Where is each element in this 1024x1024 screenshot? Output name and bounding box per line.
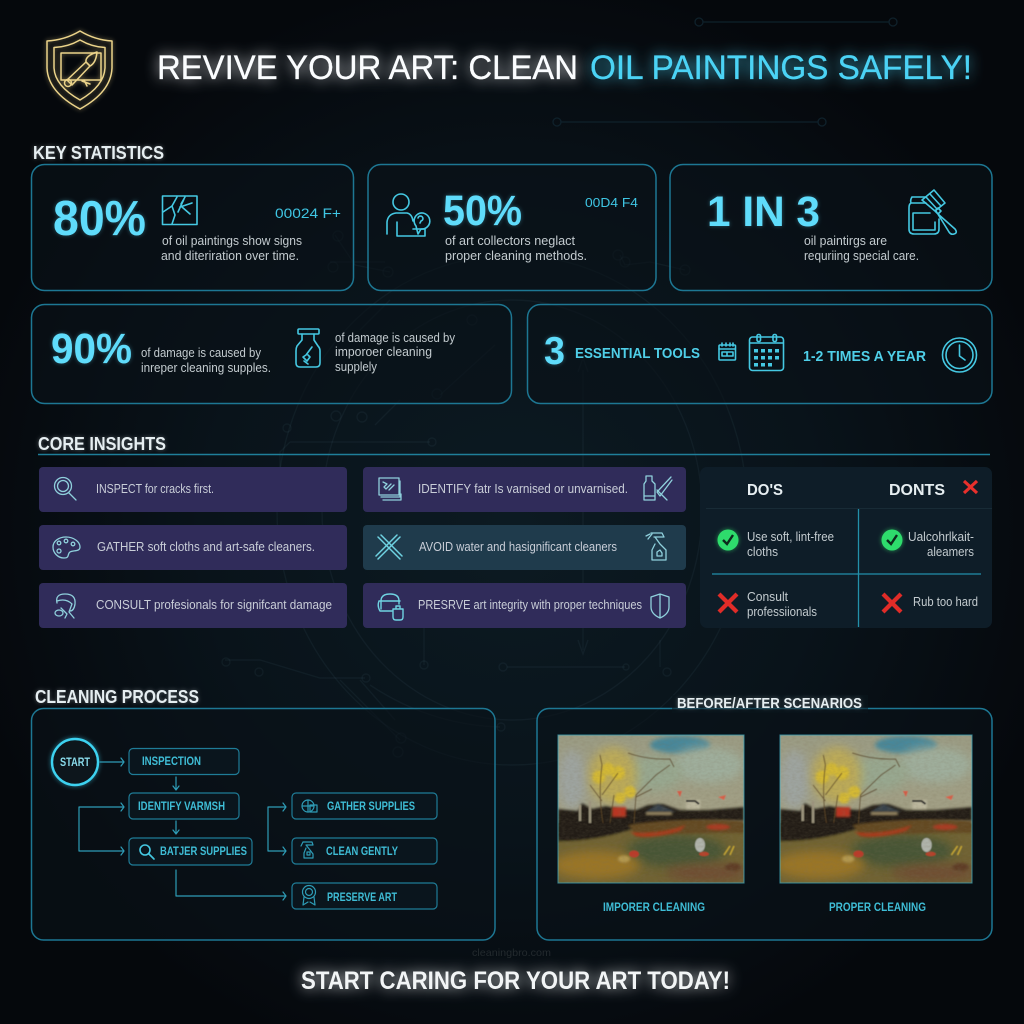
panel: do's and don'ts table: Ualcohrlkait- bbox=[908, 530, 974, 544]
insight: inspect: INSPECT for cracks first. bbox=[96, 482, 214, 496]
step: gather supplies: GATHER SUPPLIES bbox=[327, 801, 415, 813]
panel: 80% statistic: 00024 F+ bbox=[275, 205, 341, 221]
painting: proper cleaning bbox=[774, 735, 978, 914]
panel: 90% statistic: supplely bbox=[335, 360, 378, 374]
flow arrows bbox=[79, 758, 286, 900]
step: inspection bbox=[129, 748, 239, 774]
panel: 80% statistic: 80% bbox=[53, 192, 146, 246]
icon: red cross right bbox=[883, 594, 901, 612]
insight: identify bbox=[363, 467, 686, 512]
insight: gather: GATHER soft cloths and art-safe cleaners. bbox=[97, 540, 315, 554]
heading: core insights: CORE INSIGHTS bbox=[38, 434, 166, 454]
step: identify varnish: IDENTIFY VARMSH bbox=[138, 801, 225, 813]
step: clean gently: CLEAN GENTLY bbox=[326, 846, 398, 858]
step: gather supplies bbox=[292, 793, 437, 819]
panel: 1 in 3 statistic: requriing special care. bbox=[804, 249, 919, 263]
panel: 1 in 3 statistic: 1 IN 3 bbox=[707, 188, 820, 236]
icon: green check right bbox=[882, 530, 902, 550]
painting: proper cleaning: PROPER CLEANING bbox=[829, 902, 926, 914]
panel: do's and don'ts table bbox=[700, 467, 992, 628]
panel: core insight rows bbox=[39, 467, 686, 628]
watermark: cleaningbro.com bbox=[472, 947, 551, 959]
icon: cleaner bottle bbox=[296, 329, 320, 367]
step: inspection: INSPECTION bbox=[142, 756, 201, 768]
panel: 50% statistic: proper cleaning methods. bbox=[445, 249, 587, 263]
panel: tools and frequency: 3 bbox=[544, 330, 565, 373]
panel: 90% statistic bbox=[32, 304, 512, 404]
step: gather supplies with search icon bbox=[129, 838, 252, 865]
decorative top circuit lines bbox=[553, 18, 897, 126]
panel: do's and don'ts table: DONTS bbox=[889, 482, 945, 499]
insight: gather bbox=[39, 525, 347, 570]
step: preserve art bbox=[292, 883, 437, 909]
icon: shield with paintbrush logo bbox=[47, 31, 112, 109]
insight: preserve: PRESRVE art integrity with proper techniques bbox=[418, 598, 642, 612]
panel: 90% statistic: inreper cleaning supples. bbox=[141, 361, 271, 375]
panel: do's and don'ts table: aleamers bbox=[927, 545, 974, 559]
panel: 80% statistic: and diteriration over time. bbox=[161, 249, 299, 263]
icon: green check left bbox=[718, 530, 738, 550]
icon: red cross header bbox=[964, 481, 977, 493]
insight: consult: CONSULT profesionals for signifcant damage bbox=[96, 598, 332, 612]
background circuit pattern bbox=[222, 231, 747, 765]
step: gather supplies with search icon: BATJER SUPPLIES bbox=[160, 846, 247, 858]
panel: tools and frequency: ESSENTIAL TOOLS bbox=[575, 346, 700, 362]
start node: START bbox=[60, 757, 90, 769]
icon: clock bbox=[942, 338, 976, 372]
title: OIL PAINTINGS SAFELY! bbox=[590, 49, 972, 87]
start node bbox=[52, 739, 98, 785]
panel: do's and don'ts table: Rub too hard bbox=[913, 595, 978, 609]
panel: do's and don'ts table: Consult bbox=[747, 590, 789, 604]
icon: red cross left bbox=[719, 594, 737, 612]
panel: 1 in 3 statistic: oil paintirgs are bbox=[804, 234, 887, 248]
panel: do's and don'ts table: Use soft, lint-free bbox=[747, 530, 834, 544]
panel: 90% statistic: 90% bbox=[51, 325, 132, 373]
panel: do's and don'ts table: cloths bbox=[747, 545, 778, 559]
heading: cleaning process: CLEANING PROCESS bbox=[35, 687, 199, 707]
panel: 80% statistic: of oil paintings show signs bbox=[162, 234, 302, 248]
insight: avoid: AVOID water and hasignificant cleaners bbox=[419, 540, 617, 554]
panel: 50% statistic: 00D4 F4 bbox=[585, 195, 638, 210]
panel: 50% statistic: of art collectors neglact bbox=[445, 234, 576, 248]
panel: do's and don'ts table: professiionals bbox=[747, 605, 817, 619]
panel: 50% statistic: 50% bbox=[443, 187, 522, 235]
icon: cracked canvas bbox=[162, 196, 197, 224]
painting: improper cleaning bbox=[552, 735, 750, 914]
icon: small calendar bbox=[719, 343, 736, 360]
step: preserve art: PRESERVE ART bbox=[327, 892, 397, 904]
panel: before and after scenarios: BEFORE/AFTER SCENARIOS bbox=[677, 696, 862, 712]
step: clean gently bbox=[292, 838, 437, 864]
call to action footer: START CARING FOR YOUR ART TODAY! bbox=[301, 967, 730, 995]
panel: cleaning process flowchart bbox=[32, 708, 495, 940]
insight: preserve bbox=[363, 583, 686, 628]
panel: tools and frequency: 1-2 TIMES A YEAR bbox=[803, 349, 927, 365]
panel: tools and frequency bbox=[528, 304, 992, 404]
title bbox=[157, 49, 972, 87]
icon: large calendar bbox=[750, 334, 784, 370]
panel: 50% statistic bbox=[368, 164, 656, 290]
insight: avoid bbox=[363, 525, 686, 570]
panel: 80% statistic bbox=[32, 164, 354, 290]
painting: improper cleaning: IMPORER CLEANING bbox=[603, 902, 705, 914]
panel: do's and don'ts table: DO'S bbox=[747, 482, 783, 499]
heading: key statistics: KEY STATISTICS bbox=[33, 143, 164, 163]
icon: person with question mark bbox=[387, 194, 430, 236]
step: identify varnish bbox=[129, 793, 239, 819]
icon: jar and brush bbox=[909, 190, 956, 234]
insight: consult bbox=[39, 583, 347, 628]
panel: 90% statistic: imporoer cleaning bbox=[335, 345, 432, 359]
insight: inspect bbox=[39, 467, 347, 512]
title: REVIVE YOUR ART: CLEAN bbox=[157, 49, 578, 87]
panel: 1 in 3 statistic bbox=[670, 164, 992, 290]
panel: 90% statistic: of damage is caused by bbox=[141, 346, 262, 360]
insight: identify: IDENTIFY fatr Is varnised or unvarnised. bbox=[418, 482, 628, 496]
panel: 90% statistic: of damage is caused by bbox=[335, 331, 456, 345]
panel: before and after scenarios bbox=[537, 695, 992, 940]
